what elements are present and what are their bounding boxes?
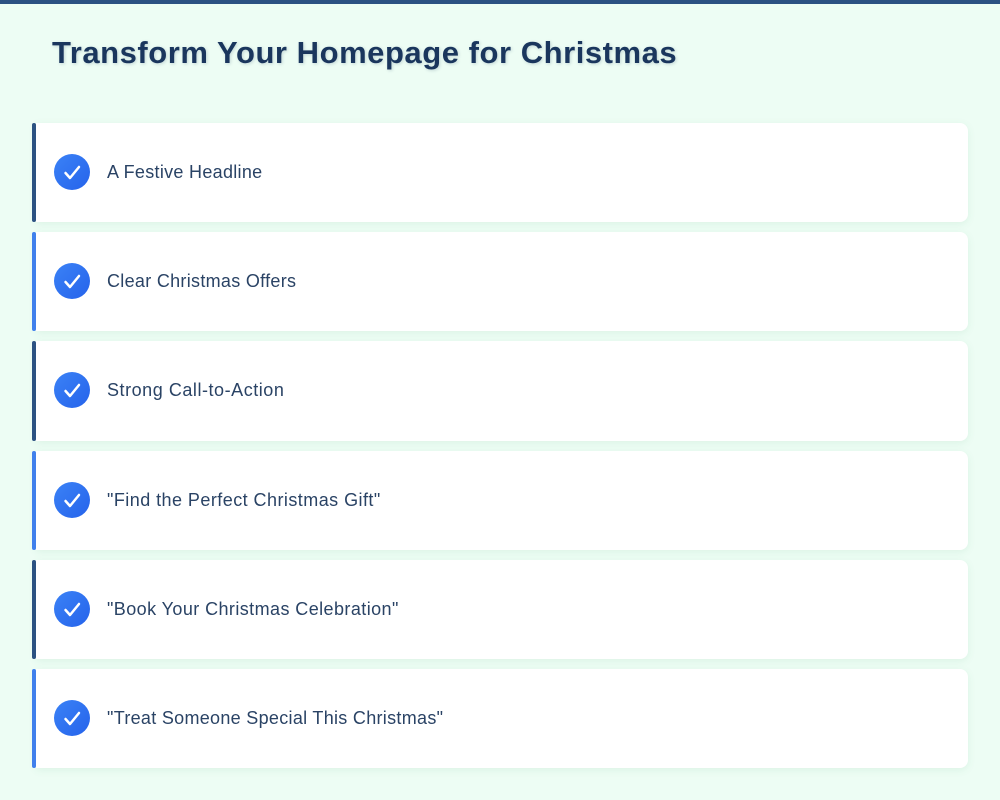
icon: check [54, 372, 90, 408]
icon: check [54, 482, 90, 518]
icon: check [54, 263, 90, 299]
title: Transform Your Homepage for Christmas [52, 35, 677, 70]
top accent bar [0, 0, 1000, 4]
panel: checklist item 3 [32, 341, 969, 444]
icon: check [54, 154, 90, 190]
panel: checklist item 6 [32, 669, 969, 771]
panel: checklist item 4 [32, 451, 969, 553]
item text: "Treat Someone Special This Christmas" [107, 708, 443, 728]
panel: checklist item 2 [32, 232, 969, 334]
icon: check [54, 700, 90, 736]
item text: Clear Christmas Offers [107, 271, 296, 291]
icon: check [54, 591, 90, 627]
panel: checklist item 1 [32, 123, 969, 225]
item text: A Festive Headline [107, 162, 262, 182]
item text: "Book Your Christmas Celebration" [107, 599, 399, 619]
panel: checklist item 5 [32, 560, 969, 662]
item text: Strong Call-to-Action [107, 380, 284, 400]
item text: "Find the Perfect Christmas Gift" [107, 490, 381, 510]
